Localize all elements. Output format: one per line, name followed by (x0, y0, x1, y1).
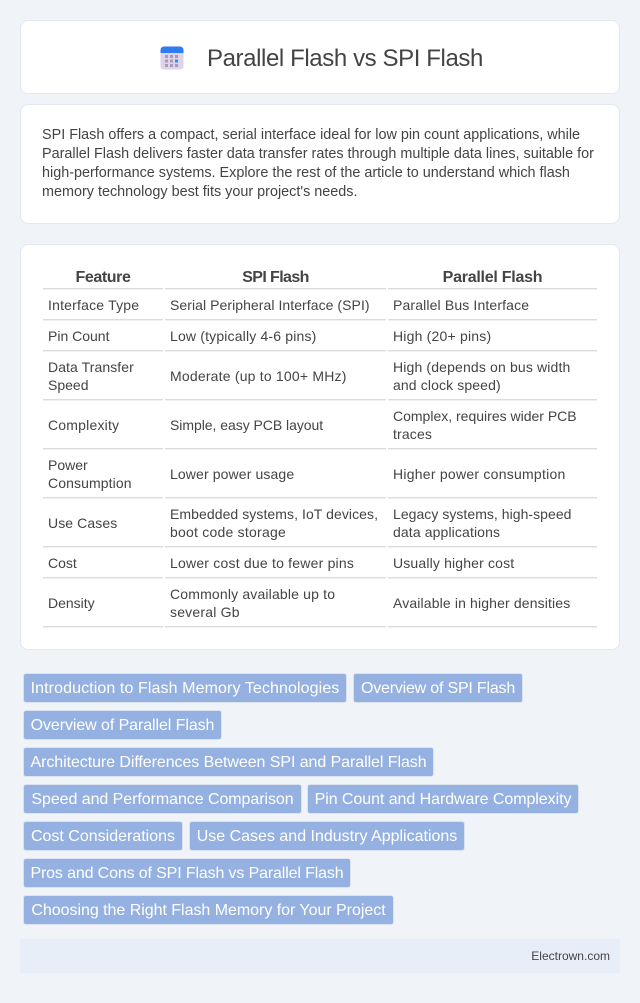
intro paragraph: memory technology best fits your project's needs. (42, 184, 358, 200)
row: power consumption: Consumption (48, 475, 132, 491)
row: use cases: Embedded systems, IoT devices, (170, 506, 378, 522)
icon: calendar (160, 46, 184, 70)
column headers (76, 269, 542, 286)
column headers: Parallel Flash (443, 269, 542, 286)
title: Parallel Flash vs SPI Flash (207, 45, 483, 72)
row: interface type: Parallel Bus Interface (393, 297, 529, 313)
row: use cases: Use Cases (48, 515, 117, 531)
row: cost: Cost (48, 555, 77, 571)
tag: Overview of SPI Flash (361, 680, 515, 697)
tag: Speed and Performance Comparison (31, 791, 294, 808)
row: pin count: Pin Count (48, 328, 109, 344)
tag (23, 858, 351, 888)
footer source text: Electrown.com (531, 949, 610, 963)
intro paragraph (42, 127, 594, 200)
row: data transfer speed: and clock speed) (393, 377, 501, 393)
tag: Use Cases and Industry Applications (197, 828, 457, 845)
row: power consumption: Power (48, 457, 88, 473)
tag (23, 710, 222, 740)
tag (353, 673, 523, 703)
tag (307, 784, 579, 814)
row: data transfer speed: Moderate (up to 100+ MHz) (170, 368, 347, 384)
row: density: several Gb (170, 604, 240, 620)
row: pin count: Low (typically 4-6 pins) (170, 328, 316, 344)
header panel (20, 20, 620, 94)
row: complexity: Simple, easy PCB layout (170, 417, 323, 433)
intro text panel (20, 104, 620, 224)
row: density: Commonly available up to (170, 586, 335, 602)
row: cost: Usually higher cost (393, 555, 514, 571)
row: interface type: Serial Peripheral Interface (SPI) (170, 297, 370, 313)
tag: Pros and Cons of SPI Flash vs Parallel Flash (30, 865, 344, 882)
row: cost: Lower cost due to fewer pins (170, 555, 354, 571)
row: density: Available in higher densities (393, 595, 570, 611)
tag (23, 821, 183, 851)
row: pin count: High (20+ pins) (393, 328, 491, 344)
row: density (48, 586, 570, 620)
row: data transfer speed: Data Transfer (48, 359, 134, 375)
footer (20, 939, 620, 973)
tag: Introduction to Flash Memory Technologies (31, 680, 339, 697)
row: data transfer speed (48, 359, 570, 393)
row: interface type: Interface Type (48, 297, 139, 313)
tag (23, 747, 434, 777)
tag (23, 673, 347, 703)
row: use cases: Legacy systems, high-speed (393, 506, 571, 522)
comparison table (43, 269, 597, 628)
row: use cases (48, 506, 571, 540)
row: use cases: data applications (393, 524, 500, 540)
tag (189, 821, 465, 851)
intro paragraph: high-performance systems. Explore the rest of the article to understand which flash (42, 165, 570, 181)
row: complexity (48, 408, 577, 442)
tag: Pin Count and Hardware Complexity (315, 791, 571, 808)
tag (23, 784, 302, 814)
tag (23, 895, 394, 925)
row: complexity: traces (393, 426, 432, 442)
tag: Cost Considerations (31, 828, 175, 845)
intro paragraph: SPI Flash offers a compact, serial interface ideal for low pin count applications, while (42, 127, 580, 143)
column headers: SPI Flash (242, 269, 309, 286)
row: complexity: Complex, requires wider PCB (393, 408, 577, 424)
tag: Architecture Differences Between SPI and Parallel Flash (30, 754, 427, 771)
topic tags (23, 673, 579, 925)
tag: Choosing the Right Flash Memory for Your Project (31, 902, 386, 919)
row: power consumption: Higher power consumption (393, 466, 566, 482)
column headers: Feature (76, 269, 130, 286)
row: interface type (48, 297, 529, 313)
tag: Overview of Parallel Flash (31, 717, 214, 734)
row: data transfer speed: High (depends on bus width (393, 359, 570, 375)
row: power consumption: Lower power usage (170, 466, 294, 482)
intro paragraph: Parallel Flash delivers faster data transfer rates through multiple data lines, suitable for (42, 146, 594, 162)
row: cost (48, 555, 514, 571)
panel: comparison table (20, 244, 620, 650)
row: complexity: Complexity (48, 417, 119, 433)
row: use cases: boot code storage (170, 524, 286, 540)
row: data transfer speed: Speed (48, 377, 88, 393)
row: density: Density (48, 595, 95, 611)
row: pin count (48, 328, 491, 344)
row: power consumption (48, 457, 566, 491)
